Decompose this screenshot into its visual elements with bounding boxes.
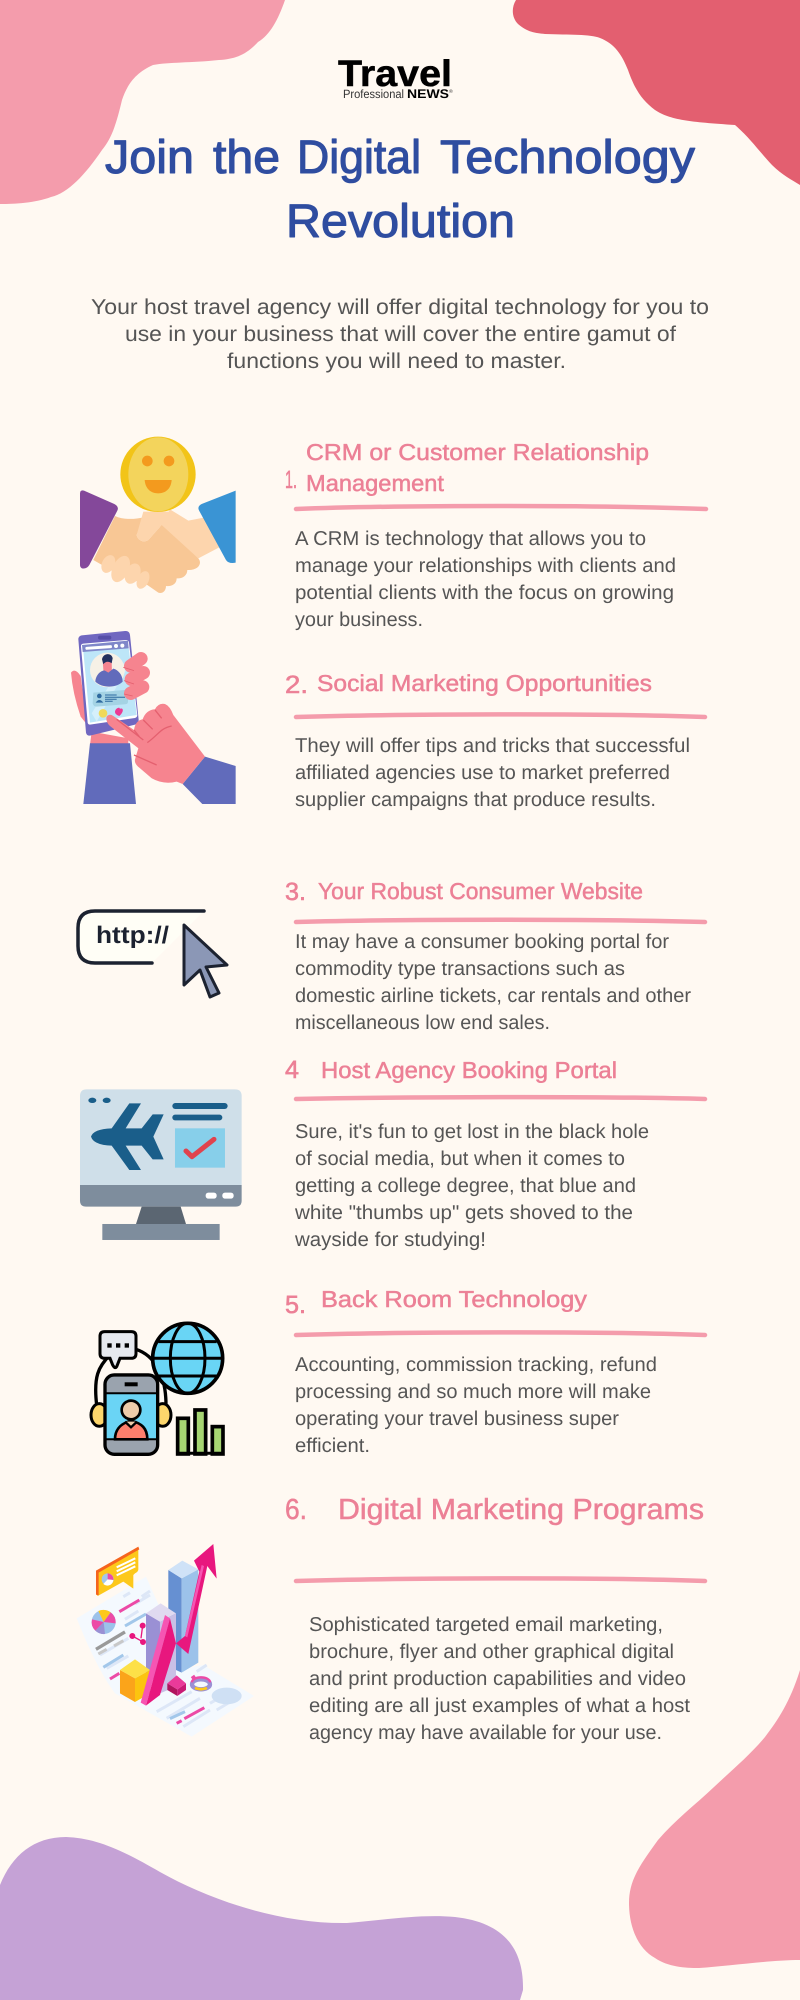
- left cuff: [80, 490, 118, 569]
- heading 4: Booking Portal: 4: [285, 1056, 299, 1084]
- smiley coin: [120, 437, 196, 512]
- title: [105, 130, 696, 247]
- fingers: [131, 659, 143, 693]
- purple bar: [146, 1613, 160, 1683]
- icon: phone, globe and bars: [91, 1323, 223, 1454]
- heading 4: Booking Portal: Host Agency Booking Portal: [321, 1057, 617, 1083]
- body 4: Sure, it's fun to get lost in the black hole: [295, 1121, 649, 1143]
- body 3: [295, 931, 691, 1034]
- intro paragraph: Your host travel agency will offer digital technology for you to: [91, 295, 709, 319]
- title: the: [213, 130, 280, 183]
- heading 5: Back Room: [285, 1286, 588, 1319]
- icon: isometric chart with arrow: [77, 1544, 254, 1737]
- logo: Travel Professional News: Professional: [343, 87, 404, 101]
- body 3: commodity type transactions such as: [295, 958, 625, 980]
- logo: Travel Professional News: Travel: [338, 53, 452, 94]
- node graph: [130, 1623, 145, 1644]
- body 1: your business.: [295, 609, 423, 631]
- donut: [192, 1679, 210, 1689]
- intro paragraph: use in your business that will cover the entire gamut of: [125, 322, 676, 346]
- magenta cube: [167, 1683, 177, 1696]
- heading 5: Back Room: 5.: [285, 1291, 306, 1319]
- body 3: miscellaneous low end sales.: [295, 1012, 550, 1034]
- heading 6: Digital Marketing: Digital Marketing Programs: [338, 1494, 704, 1526]
- heading 1: CRM: [285, 439, 649, 496]
- body 2: affiliated agencies use to market preferred: [295, 762, 670, 784]
- blob: top right red: [513, 0, 800, 185]
- body 4: getting a college degree, that blue and: [295, 1175, 636, 1197]
- heading 3: Consumer Website: 3.: [285, 878, 306, 906]
- body 4: white "thumbs up" gets shoved to the: [294, 1202, 633, 1224]
- body 4: [294, 1121, 649, 1251]
- body 6: agency may have available for your use.: [309, 1722, 662, 1744]
- pink growth arrow: [141, 1615, 170, 1706]
- heading 5: Back Room: Back Room Technology: [321, 1286, 588, 1312]
- yellow block: [120, 1670, 135, 1702]
- body 1: A CRM is technology that allows you to: [295, 528, 646, 550]
- icon: http address with cursor: http://: [96, 922, 169, 949]
- blob: bottom left purple: [0, 1837, 523, 2000]
- right cuff: [198, 491, 236, 563]
- title: Technology: [440, 130, 696, 183]
- heading 1: CRM: CRM or Customer Relationship: [306, 439, 649, 465]
- heading 6: Digital Marketing: 6.: [285, 1494, 307, 1526]
- body 5: Accounting, commission tracking, refund: [295, 1354, 657, 1376]
- intro paragraph: [91, 295, 709, 373]
- logo: Travel Professional News: NEWS: [407, 87, 449, 101]
- body 2: [295, 735, 690, 811]
- body 6: [309, 1614, 690, 1744]
- body 6: and print production capabilities and video: [309, 1668, 686, 1690]
- body 3: It may have a consumer booking portal for: [295, 931, 669, 953]
- heading 2: Social Marketing: 2.: [285, 671, 308, 699]
- body 5: efficient.: [295, 1435, 370, 1457]
- body 5: [295, 1354, 657, 1457]
- icon: computer monitor with plane: [80, 1089, 242, 1240]
- pie chart: [92, 1610, 116, 1634]
- intro paragraph: functions you will need to master.: [227, 349, 566, 373]
- icon: hands with smartphone: [71, 631, 236, 804]
- blob: top left pink: [0, 0, 285, 204]
- body 3: domestic airline tickets, car rentals and other: [295, 985, 691, 1007]
- body 4: of social media, but when it comes to: [295, 1148, 625, 1170]
- chat callout: [97, 1547, 138, 1596]
- icon: http address with cursor: [78, 911, 227, 997]
- logo: Travel Professional News: ®: [449, 89, 453, 95]
- body 2: supplier campaigns that produce results.: [295, 789, 656, 811]
- body 6: Sophisticated targeted email marketing,: [309, 1614, 663, 1636]
- title: Revolution: [286, 194, 515, 247]
- body 6: editing are all just examples of what a host: [309, 1695, 690, 1717]
- phone body: [78, 631, 139, 736]
- heading 1: CRM: Management: [306, 470, 445, 496]
- title: Digital: [297, 130, 421, 183]
- title: Join: [105, 130, 194, 183]
- body 4: wayside for studying!: [294, 1229, 486, 1251]
- body 2: They will offer tips and tricks that successful: [295, 735, 690, 757]
- blob: bottom right pink: [629, 1670, 800, 1968]
- heading 1: CRM: 1.: [285, 466, 297, 494]
- heading 3: Consumer Website: Your Robust Consumer Website: [318, 878, 643, 904]
- body 1: potential clients with the focus on growing: [295, 582, 674, 604]
- body 5: processing and so much more will make: [295, 1381, 651, 1403]
- body 6: brochure, flyer and other graphical digital: [309, 1641, 674, 1663]
- body 1: manage your relationships with clients and: [295, 555, 676, 577]
- body 5: operating your travel business super: [295, 1408, 619, 1430]
- heading 2: Social Marketing: Social Marketing Opportunities: [317, 670, 652, 696]
- body 1: [295, 528, 676, 631]
- pointing hand: [106, 704, 205, 784]
- icon: handshake with smiley coin: [80, 437, 236, 593]
- blue bar: [168, 1570, 182, 1673]
